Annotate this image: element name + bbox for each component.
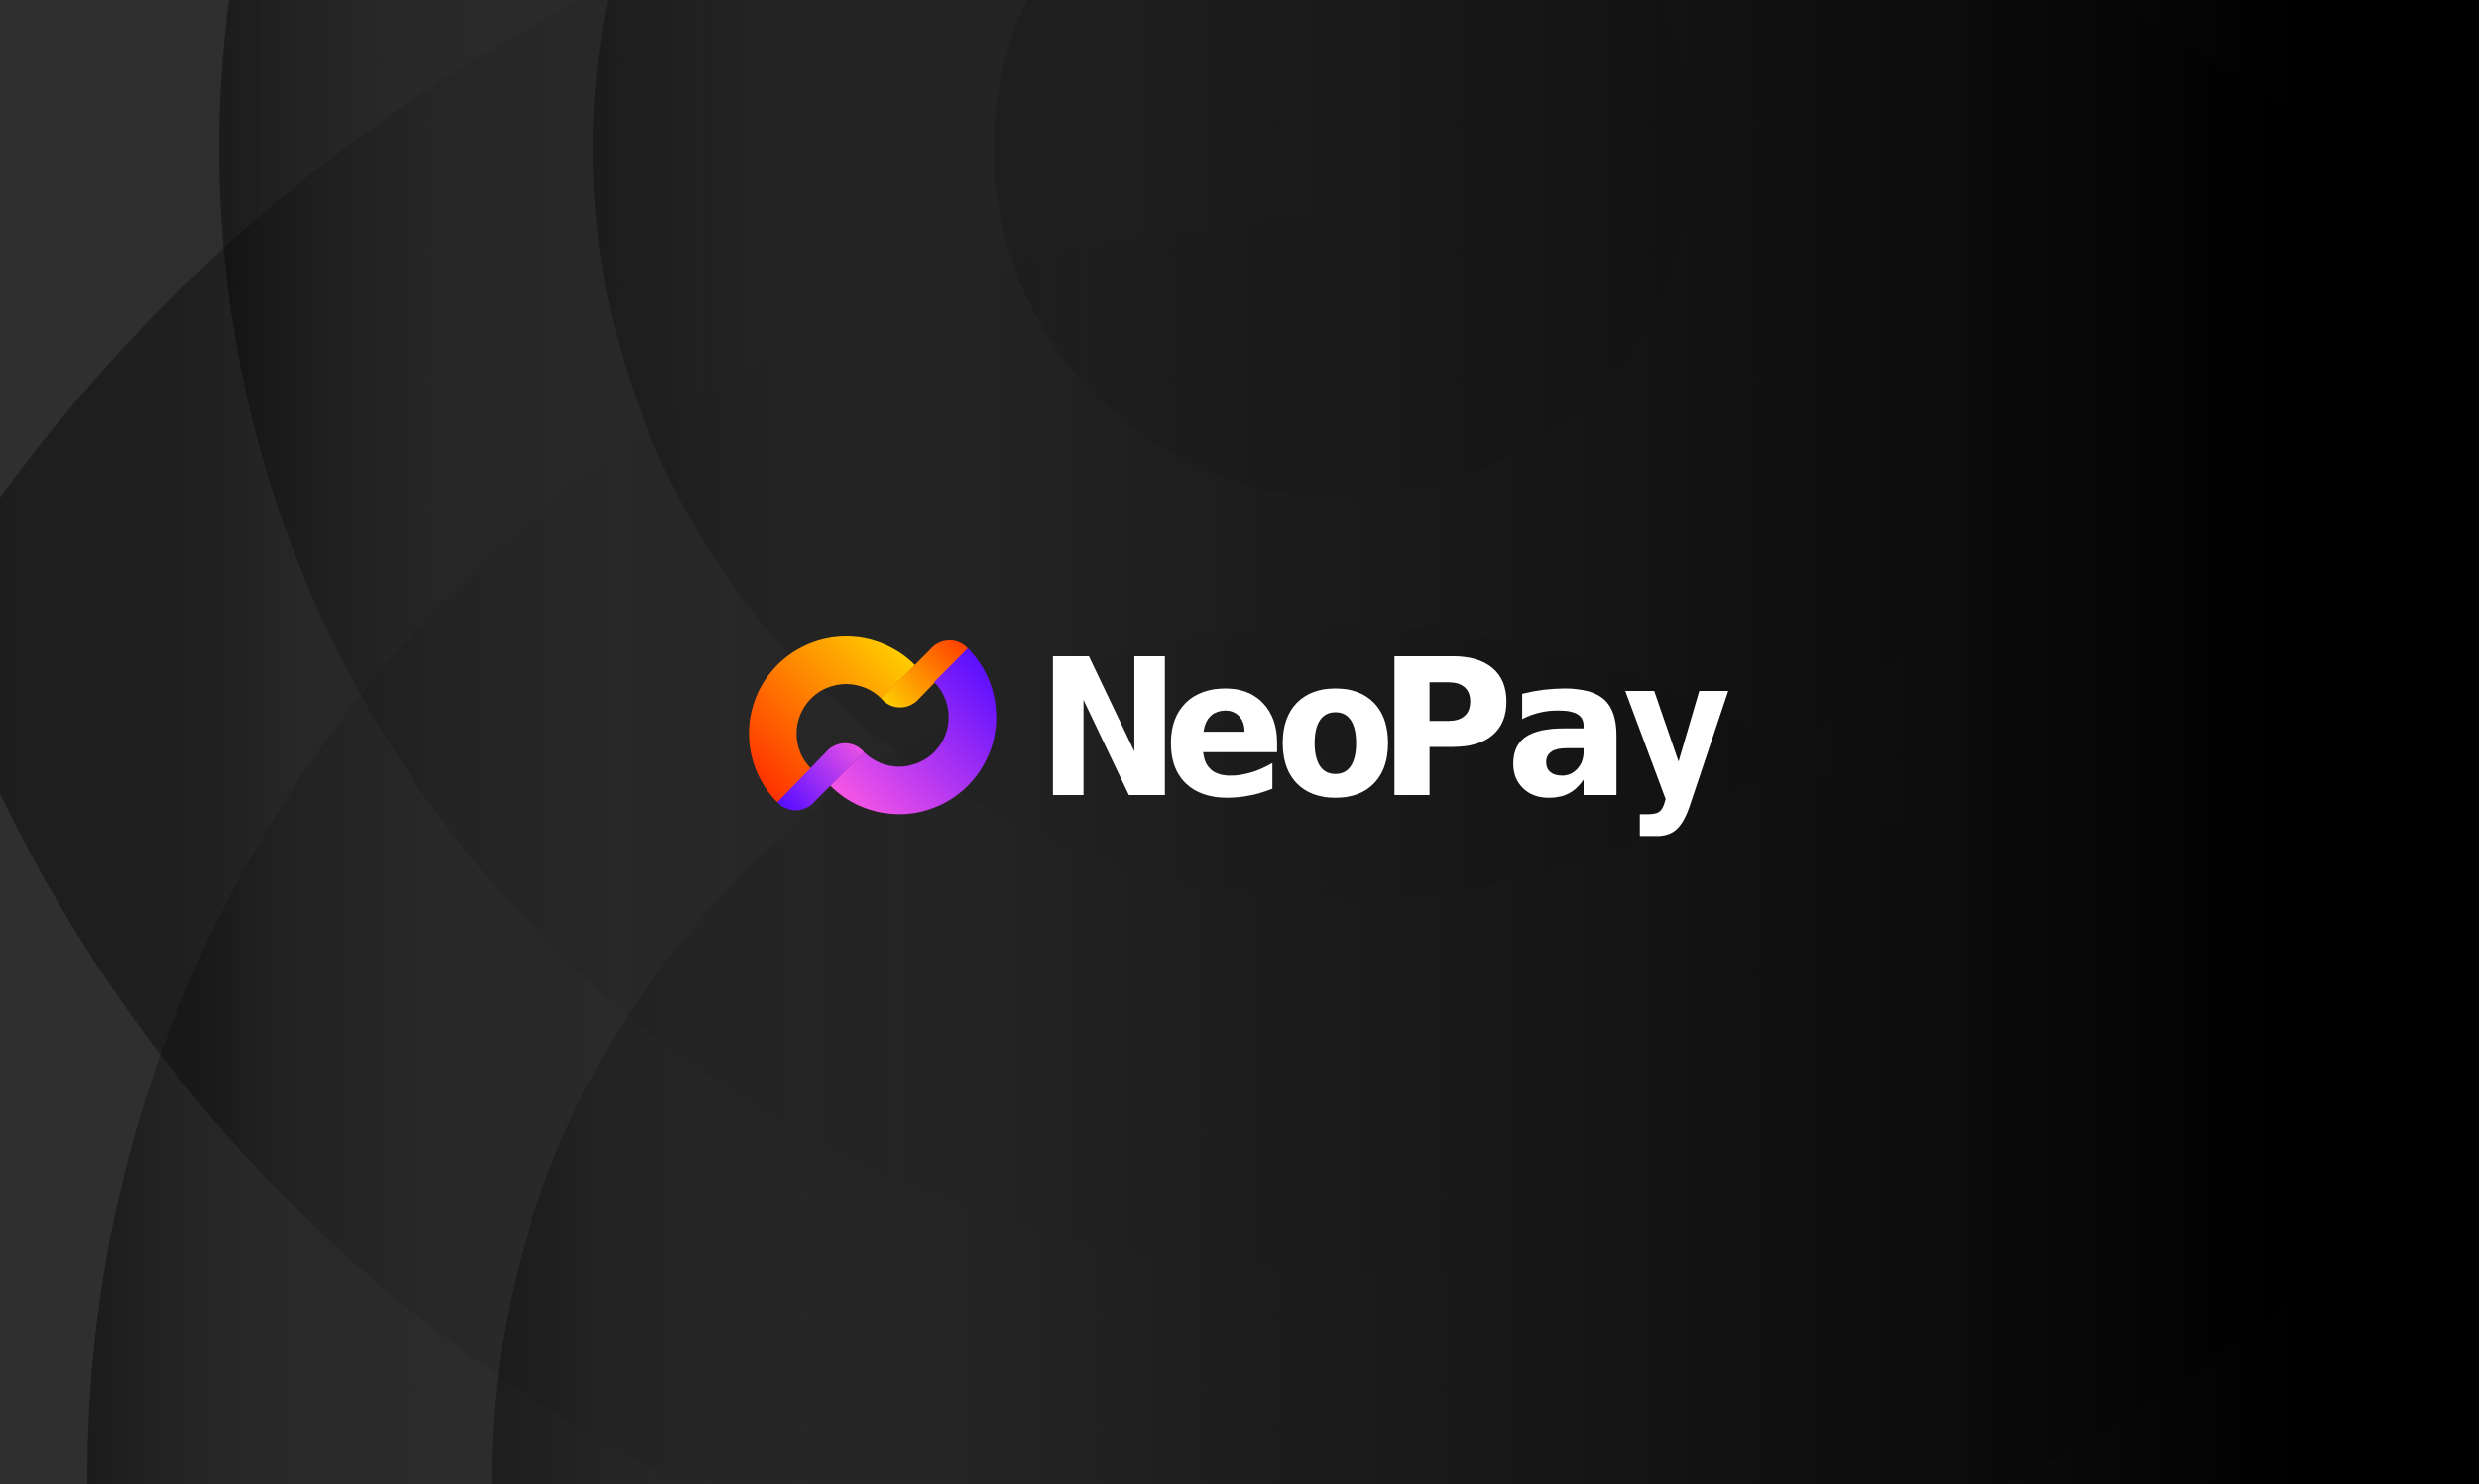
- wordmark: NeoPay: a: [1505, 619, 1631, 840]
- wordmark: NeoPay: [1037, 619, 1731, 841]
- background: dark overlap of the two largest discs: [0, 248, 260, 1150]
- orange connector stub: [882, 640, 968, 708]
- orange ring segment: [749, 636, 915, 802]
- wordmark: NeoPay: P: [1377, 619, 1514, 840]
- purple ring segment: [830, 648, 997, 814]
- wordmark: NeoPay: y: [1623, 620, 1731, 841]
- wordmark: NeoPay: o: [1275, 619, 1395, 841]
- wordmark: NeoPay: N: [1037, 619, 1181, 841]
- background: concentric discs, top set: [219, 0, 1039, 706]
- wordmark: NeoPay: e: [1163, 620, 1286, 841]
- background: concentric discs, bottom set: [87, 966, 649, 1484]
- logo mark: infinity loop: [749, 636, 997, 814]
- purple connector stub: [777, 743, 864, 810]
